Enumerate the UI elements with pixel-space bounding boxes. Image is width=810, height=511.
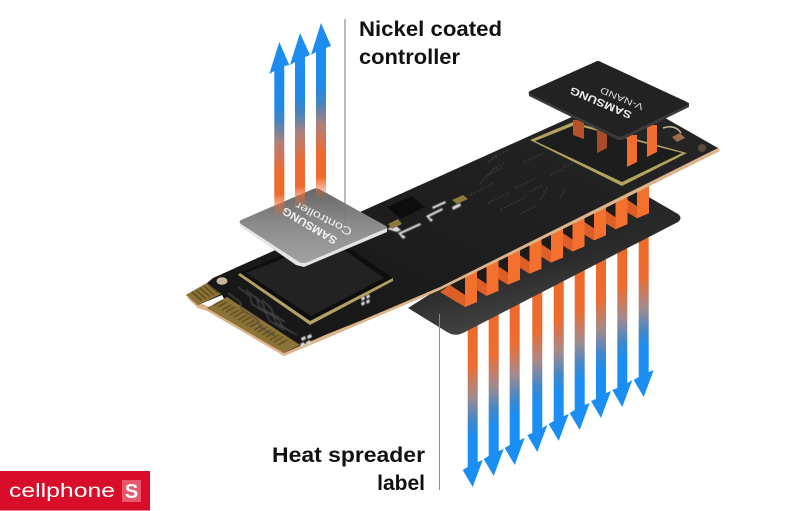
silkscreen markings: [470, 150, 586, 214]
gold connector: long section: [207, 297, 300, 353]
connector teeth: [192, 284, 287, 345]
orange heat fins: [440, 175, 649, 307]
callout: nickel coated controller: Nickel coated: [359, 18, 502, 41]
board edge: [186, 147, 720, 356]
orange heat bars under V-NAND: [573, 120, 657, 167]
logo: cellphone S: [0, 471, 150, 510]
copper traces: [228, 287, 297, 336]
contact pads: [672, 133, 685, 142]
SMD component markings: [300, 201, 461, 347]
callout: nickel coated controller: [359, 18, 502, 69]
board surface: [186, 94, 718, 353]
leader line: heat spreader: [438, 314, 440, 490]
callout: heat spreader label: Heat spreader: [272, 444, 425, 467]
chip edge: [240, 223, 387, 267]
gold lead: [663, 127, 681, 133]
chip edge: [529, 93, 689, 140]
logo: cellphone S: S: [125, 481, 138, 503]
V-NAND chip: [528, 61, 689, 140]
gold connector: short section: [186, 283, 221, 305]
callout: heat spreader label: label: [377, 472, 425, 495]
chip brand: SAMSUNG: [280, 204, 340, 246]
gold frame: [530, 122, 687, 186]
chip model: V-NAND: [598, 85, 645, 112]
small gold components: [388, 195, 468, 229]
leader line: controller: [344, 19, 346, 222]
callout: heat spreader label: [272, 444, 425, 495]
chip top surface: [240, 188, 387, 263]
M.2 circuit board: [186, 94, 720, 356]
chip top surface: [528, 61, 688, 136]
logo: cellphone S: cellphone: [9, 481, 115, 502]
small black IC: [387, 196, 425, 219]
arrows: heat flowing up from controller: [269, 23, 331, 215]
heat spreader label sheet: [408, 192, 680, 335]
chip model: Controller: [293, 198, 354, 238]
chip brand: SAMSUNG: [568, 84, 634, 121]
callout: nickel coated controller: controller: [359, 46, 460, 69]
V-NAND package on board: [530, 122, 706, 186]
die surface: [535, 125, 682, 182]
controller package on board: [238, 235, 393, 325]
mounting hole: [698, 144, 706, 152]
grey nickel coated controller chip: [240, 188, 387, 267]
mounting hole: [216, 277, 228, 285]
arrows: heat flowing down: [463, 234, 654, 487]
